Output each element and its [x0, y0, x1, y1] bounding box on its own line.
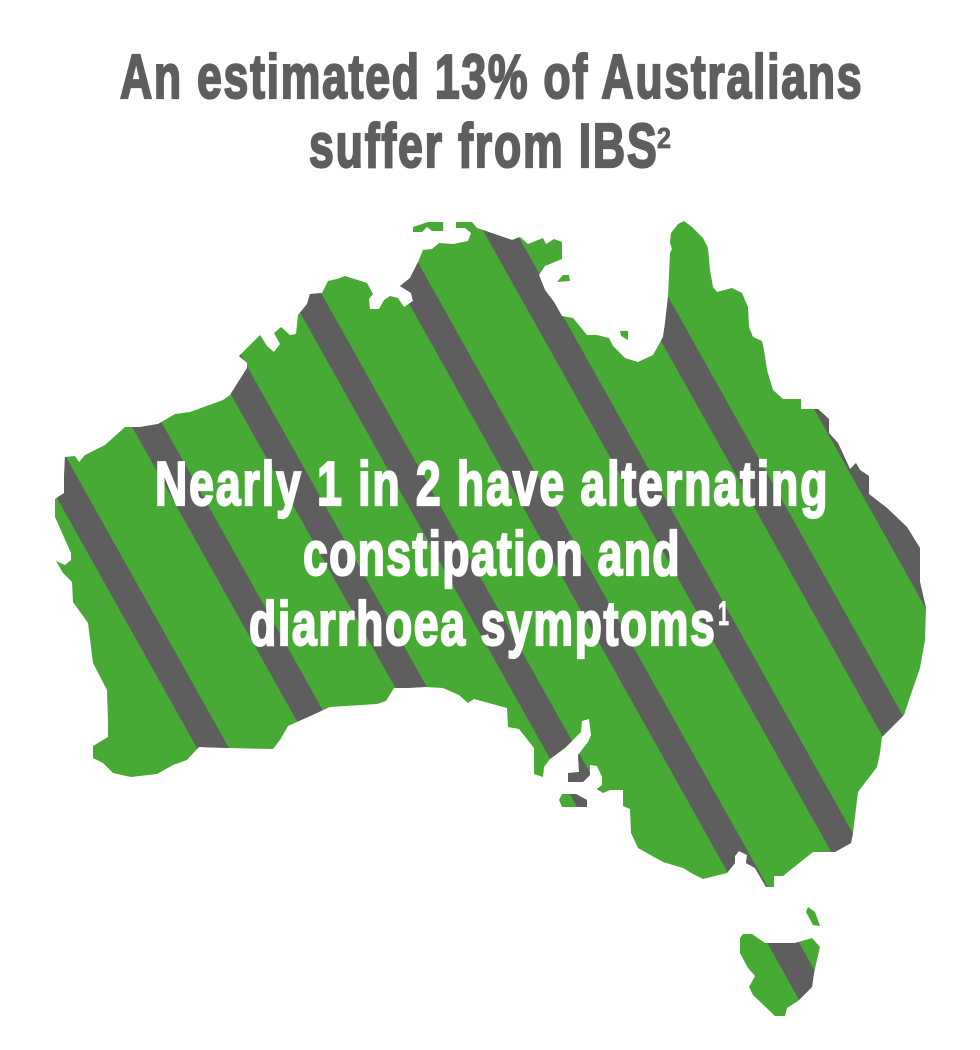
- map statistic text: 1: [718, 595, 729, 633]
- title: 2: [657, 123, 671, 155]
- map of Australia with diagonal stripes: [55, 221, 926, 1016]
- title: [120, 43, 862, 181]
- map statistic text: constipation and: [303, 520, 680, 589]
- map statistic text: [155, 450, 827, 659]
- map statistic text: diarrhoea symptoms: [249, 590, 715, 659]
- title: An estimated 13% of Australians: [120, 43, 862, 112]
- map statistic text: Nearly 1 in 2 have alternating: [155, 450, 827, 519]
- title: suffer from IBS: [309, 112, 657, 181]
